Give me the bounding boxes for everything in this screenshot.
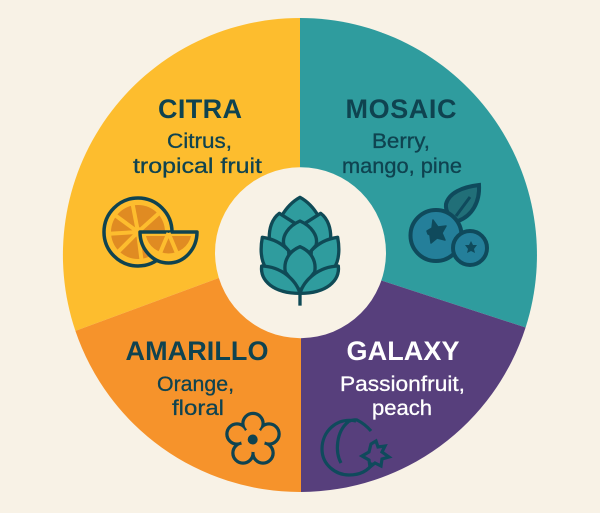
galaxy flavour: peach [372, 396, 432, 420]
citra flavour [133, 129, 262, 178]
amarillo flavour [157, 372, 234, 420]
panel: citra [63, 18, 300, 331]
galaxy flavour: Passionfruit, [340, 372, 465, 396]
icon: passionfruit and star [322, 420, 389, 475]
citra name: CITRA [158, 94, 242, 124]
mosaic name: MOSAIC [346, 94, 456, 124]
amarillo name: AMARILLO [126, 336, 268, 366]
panel: amarillo [75, 248, 301, 492]
amarillo flavour: floral [172, 396, 224, 420]
galaxy name: GALAXY [346, 336, 460, 366]
mosaic flavour: Berry, [372, 129, 430, 153]
galaxy flavour [340, 372, 465, 420]
center disc [215, 167, 386, 338]
icon: orange slices [104, 198, 197, 266]
icon: hop cone [261, 197, 339, 306]
mosaic flavour [342, 129, 462, 178]
icon: flower [228, 415, 278, 462]
panel: mosaic [300, 18, 537, 328]
icon: blueberries [410, 185, 487, 265]
citra flavour: tropical fruit [133, 154, 262, 178]
citra flavour: Citrus, [167, 129, 232, 153]
mosaic flavour: mango, pine [342, 154, 462, 178]
panel: galaxy [300, 254, 526, 492]
amarillo flavour: Orange, [157, 372, 234, 396]
